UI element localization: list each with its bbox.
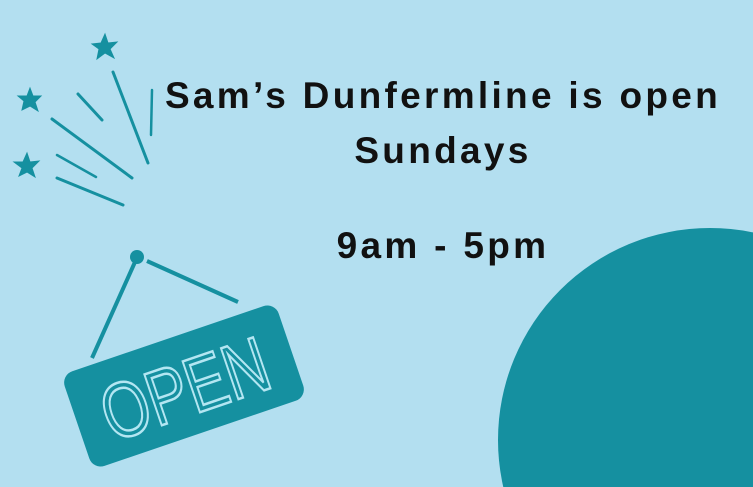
title [165, 75, 721, 171]
icon: open sign: OPEN [89, 319, 281, 458]
hours: 9am - 5pm [337, 225, 549, 266]
icon: stars burst [12, 32, 154, 206]
title: Sam’s Dunfermline is open [165, 75, 721, 116]
title: Sundays [354, 130, 532, 171]
icon: open sign [64, 250, 304, 466]
